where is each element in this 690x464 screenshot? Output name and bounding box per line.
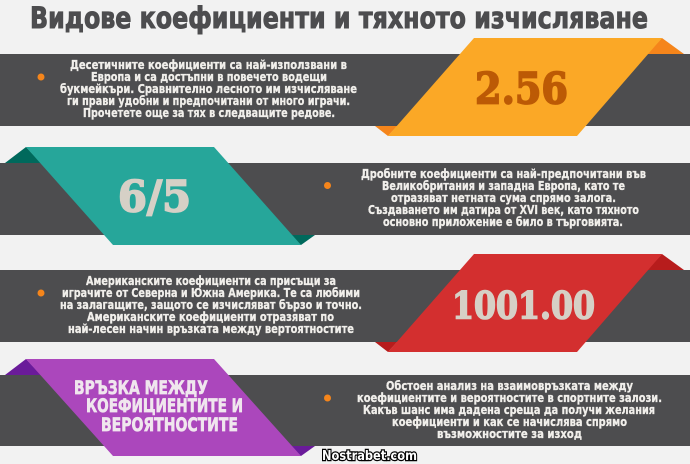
text: decimal odds description bbox=[60, 58, 357, 120]
value: 2.56: 2.56 bbox=[475, 64, 568, 114]
heading: odds and probabilities: КОЕФИЦИЕНТИТЕ И bbox=[86, 395, 243, 417]
text: decimal odds description: Десетичните коефициенти са най-използвани в bbox=[70, 58, 347, 72]
text: american odds description: Американските коефициенти отразяват по bbox=[87, 310, 334, 324]
bullet: odds and probabilities bbox=[324, 394, 331, 402]
text: fractional odds description bbox=[361, 167, 646, 229]
text: decimal odds description: Европа и са достъпни в повечето водещи bbox=[91, 70, 327, 84]
text: american odds description: най-лесен начин връзката между вертоятностите bbox=[68, 322, 354, 336]
text: odds and probabilities description bbox=[357, 379, 662, 441]
text: fractional odds description: основно приложение е било в търговията. bbox=[383, 215, 623, 229]
value: 6/5: 6/5 bbox=[118, 172, 191, 222]
ribbon fold: teal left bbox=[5, 147, 41, 163]
ribbon fold: purple right bbox=[290, 446, 315, 456]
band: odds and probabilities bbox=[0, 375, 690, 446]
text: odds and probabilities description: коефициенти и как се начислява спрямо bbox=[392, 415, 627, 429]
text: american odds description bbox=[60, 274, 362, 336]
panel: odds and probabilities bbox=[0, 359, 690, 456]
ribbon fold: orange right bbox=[647, 38, 684, 54]
heading: odds and probabilities bbox=[74, 377, 243, 436]
bullet: decimal odds bbox=[38, 74, 44, 80]
footer: site name: Nostrabet.com bbox=[322, 449, 417, 464]
text: decimal odds description: Прочетете още за тях в следващите редове. bbox=[83, 106, 335, 120]
text: odds and probabilities description: Обстоен анализ на взаимовръзката между bbox=[386, 379, 633, 393]
text: american odds description: играчите от Северна и Южна Америка. Те са любими bbox=[62, 286, 360, 300]
text: decimal odds description: букмейкъри. Сравнително лесното им изчисляване bbox=[60, 82, 357, 96]
ribbon fold: orange left bbox=[375, 126, 397, 136]
ribbon fold: red right bbox=[647, 254, 684, 270]
text: odds and probabilities description: възможностите за изход bbox=[437, 427, 582, 441]
text: fractional odds description: Великобритания и западна Европа, като те bbox=[382, 179, 625, 193]
ribbon: teal bbox=[26, 147, 301, 245]
ribbon: purple bbox=[26, 359, 301, 456]
band: american odds bbox=[0, 270, 690, 342]
ribbon fold: red left bbox=[375, 342, 397, 352]
ribbon fold: teal right bbox=[290, 235, 315, 245]
bullet: american odds bbox=[38, 290, 44, 296]
panel: decimal odds bbox=[0, 38, 690, 136]
bullet: fractional odds bbox=[324, 182, 331, 189]
band: decimal odds bbox=[0, 54, 690, 126]
heading: odds and probabilities: ВРЪЗКА МЕЖДУ bbox=[74, 377, 208, 399]
value: 1001.00: 1001.00 bbox=[452, 284, 595, 328]
text: american odds description: на залагащите, защото се изчисляват бързо и точно. bbox=[60, 298, 362, 312]
text: american odds description: Американските коефициенти са присъщи за bbox=[86, 274, 336, 288]
text: fractional odds description: отразяват нетната сума спрямо залога. bbox=[391, 191, 616, 205]
ribbon: orange bbox=[388, 38, 662, 136]
ribbon fold: purple left bbox=[5, 359, 41, 375]
text: decimal odds description: ги прави удобни и предпочитани от много играчи. bbox=[67, 94, 350, 108]
ribbon: red bbox=[388, 254, 662, 352]
band: fractional odds bbox=[0, 163, 690, 235]
panel: american odds bbox=[0, 254, 690, 352]
heading: odds and probabilities: ВЕРОЯТНОСТИТЕ bbox=[101, 414, 238, 436]
panel: fractional odds bbox=[0, 147, 690, 245]
